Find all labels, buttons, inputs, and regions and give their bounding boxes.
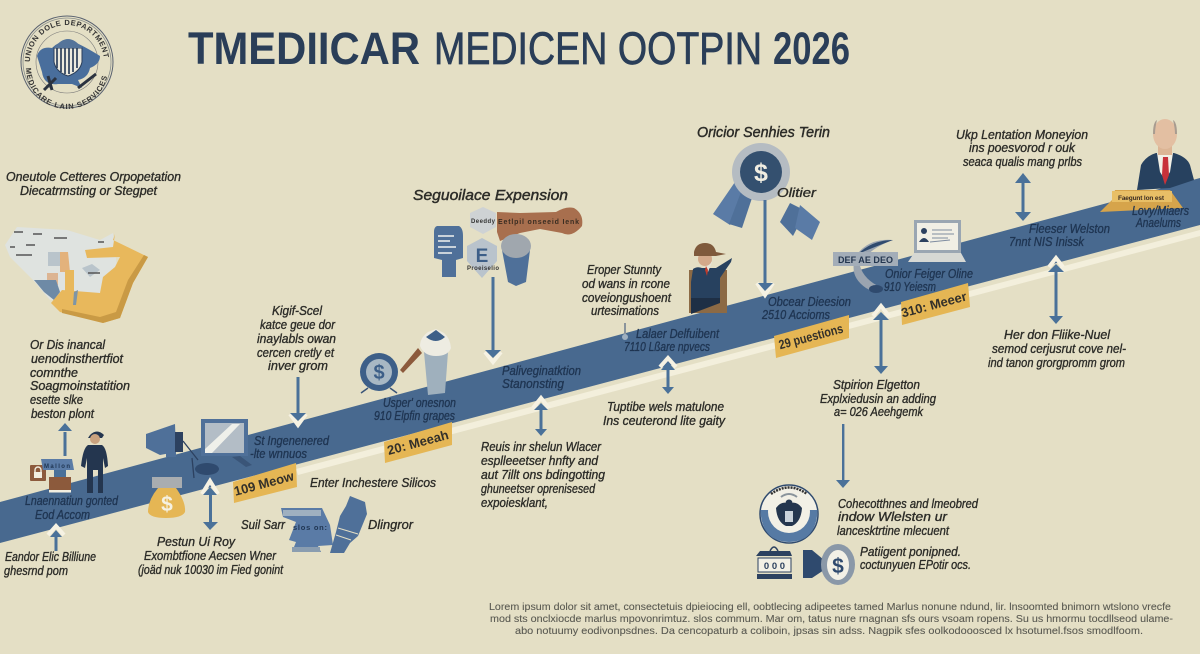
text: band label eight: Fleeser Welston (1029, 222, 1110, 236)
text: Cohecotthnes note (837, 497, 979, 538)
text: band label three: Usper' onesnon (383, 396, 456, 410)
text: Cohecotthnes note: indow Wlelsten ur (838, 510, 948, 524)
title: 2026 (773, 23, 850, 74)
arrow: long down to seal (836, 424, 850, 488)
text: Ukp Lentation note: ins poesvorod r ouk (969, 141, 1076, 155)
text: Eroper Stunnty note (582, 263, 671, 318)
text: footer paragraph (489, 601, 1174, 637)
text: lower left note (4, 550, 96, 578)
icon: man in suit with plaque (1100, 119, 1194, 212)
icon: scroll (281, 508, 333, 552)
text: band label nine (1132, 204, 1189, 230)
text: Eroper Stunnty note: od wans in rcone (582, 277, 670, 291)
icon: bank building: 0 0 0 (764, 561, 785, 572)
icon: dollar coin with hammer (360, 348, 422, 393)
text: Olitier: Olitier (777, 186, 817, 200)
icon: crescent and label box (833, 240, 898, 293)
text: Reuis note: Reuis inr shelun Wlacer (481, 440, 602, 454)
text: Patiigent note (860, 545, 971, 572)
icon: scroll: slos on: (293, 523, 327, 532)
icon: eagle seal (760, 485, 818, 543)
text: Ukp Lentation note: seaca qualis mang prlbs (963, 155, 1082, 169)
text: band label one: Lnaennatiun gonted (25, 494, 119, 508)
text block: left financial note: Or Dis inancal (30, 338, 106, 352)
text: Tuptibe note (603, 400, 726, 428)
text: Cohecotthnes note: lancesktrtine mlecuent (837, 524, 949, 538)
text: band label six: Obcear Dieesion (768, 295, 851, 309)
text: Tuptibe note: Tuptibe wels matulone (607, 400, 724, 414)
text: Tuptibe note: Ins ceuterond lite gaity (603, 414, 726, 428)
text: Stpirion note: a= 026 Aeehgemk (834, 405, 924, 419)
arrow: double under label seven (873, 306, 889, 374)
arrow: double under label four (533, 398, 549, 436)
icon: expansion cluster: Proeiselio (467, 266, 499, 272)
icon: coin key (803, 544, 855, 585)
icon: expansion cluster: Deeddy (471, 219, 496, 225)
text: band label five: 7110 Lßare npvecs (624, 340, 710, 354)
arrow: double centre left (202, 481, 218, 530)
text: Patiigent note: Patiigent ponipned. (860, 545, 961, 559)
icon: expansion cluster: E (476, 246, 488, 267)
icon: seated man saluting (689, 243, 732, 314)
text: band label two (250, 434, 330, 461)
text: Kigif-Scel note: inver grom (268, 359, 328, 373)
tag: 310: Meeer: 310: Meeer (899, 289, 968, 320)
text: Patiigent note: coctunyuen EPotir ocs. (860, 558, 971, 572)
tag: 20: Meeah: 20: Meeah (386, 427, 450, 458)
text: footer paragraph: abo notuumy eodivonpsdnes. Da cencopaturb a coliboin, jpsas sin adss. Nagpik sfes oolkodooosced lx hsotumel.fsos smodlfoom. (515, 625, 1143, 637)
text: Stpirion note (820, 378, 936, 419)
icon: expansion cluster (434, 207, 582, 286)
text: Her don note: semod cerjusrut cove nel- (992, 342, 1126, 356)
icon: laptop (908, 220, 966, 262)
text: band label nine: Lovy/Miaers (1132, 204, 1189, 218)
text: Stpirion note: Explxiedusin an adding (820, 392, 936, 406)
text: Cohecotthnes note: Cohecotthnes and lmeobred (838, 497, 979, 511)
arrow: down from expansion (485, 277, 501, 362)
text: Suil Sarr: Suil Sarr (241, 518, 286, 532)
icon: ribbons right (780, 203, 820, 240)
text: Her don note: ind tanon grorgpromm grom (988, 356, 1125, 370)
title: MEDICEN OOTPIN (434, 23, 762, 74)
text: Pestun note: Pestun Ui Roy (157, 535, 236, 549)
text: Her don note (988, 328, 1126, 370)
heading: Oricior Senhies Terin: Oricior Senhies Terin (697, 124, 830, 141)
text: Pestun note (138, 535, 283, 577)
text: band label eight (1009, 222, 1110, 249)
text: Stpirion note: Stpirion Elgetton (833, 378, 920, 392)
icon: dollar medal with ribbons (713, 143, 790, 228)
icon: dollar medal with ribbons: $ (754, 159, 768, 187)
text: Kigif-Scel note: cercen cretly et (257, 346, 334, 360)
icon: money bag: $ (161, 493, 173, 516)
text: Dlingror: Dlingror (368, 518, 414, 532)
text: band label seven (884, 267, 973, 294)
icon: money bag (148, 477, 185, 518)
arrow: down from medal (757, 200, 773, 295)
heading: map caption: Diecatrmsting or Stegpet (20, 184, 158, 198)
icon: projector (146, 424, 198, 478)
text: band label two: -lte wnnuos (250, 447, 307, 461)
title: TMEDIICAR (188, 23, 420, 74)
text: Eroper Stunnty note: coveiongushoent (582, 291, 671, 305)
icon: round seal top left (20, 16, 114, 109)
text: band label one (25, 494, 119, 522)
text: Kigif-Scel note: inaylabls owan (257, 332, 336, 346)
text: Reuis note: aut 7illt ons bdingotting (481, 468, 605, 482)
heading: map caption: Oneutole Cetteres Orpopetation (6, 170, 181, 184)
icon: US map (5, 227, 148, 323)
icon: pen nib (330, 496, 367, 553)
text: Pestun note: (joäd nuk 10030 im Fied gonint (138, 563, 283, 577)
text: Eroper Stunnty note: urtesimations (591, 304, 659, 318)
text: footer paragraph: mod sts onclxiocde marlus mpovonrimtuz. slos commum. Mar om, tatus nure rnagnan sfs ours vsoam ropens. Su us hmormu tocdllseod ulame- (490, 613, 1174, 625)
icon: round seal top left: MEDICARE LAIN SERVICES (26, 68, 107, 109)
arrow: double under label eight (1048, 258, 1064, 324)
icon: computer monitor (195, 419, 252, 475)
text: band label two: St Ingenenered (254, 434, 330, 448)
text block: left financial note (30, 338, 130, 421)
icon: lock, sign and box (30, 459, 74, 492)
text: band label six: 2510 Accioms (761, 308, 830, 322)
text: band label four: Stanonsting (502, 377, 564, 391)
text: band label six (761, 295, 851, 322)
icon: crescent and label box: DEF AE DEO (838, 255, 893, 265)
icon: grey cup (420, 329, 451, 395)
arrow: short grey tick (622, 323, 628, 340)
text: Reuis note: esplleeetser hnfty and (481, 454, 599, 468)
text: Ukp Lentation note (956, 128, 1088, 169)
text: Her don note: Her don Fliike-Nuel (1004, 328, 1111, 342)
text: footer paragraph: Lorem ipsum dolor sit amet, consectetuis dpieiocing ell, oobtlecing adipeetes tamed Marlus nonune ndund, lir. lnsoomted bnimorn wtslono vrecfe (489, 601, 1171, 613)
icon: dollar coin with hammer: $ (373, 362, 385, 384)
text: Reuis note: expoiesklant, (481, 496, 548, 510)
arrow: down from Kigif note (290, 377, 306, 425)
text: Enter Inchestere: Enter Inchestere Silicos (310, 476, 436, 490)
heading: map caption (6, 170, 181, 198)
text block: left financial note: comnthe (30, 366, 78, 380)
text: Kigif-Scel note (257, 304, 336, 373)
text: band label nine: Anaelums (1135, 216, 1181, 230)
text: band label three: 910 Elpfin grapes (374, 409, 455, 423)
icon: lock, sign and box: Mallon (44, 464, 70, 470)
text block: left financial note: esette slke (30, 393, 83, 407)
text: lower left note: Eandor Elic Billiune (5, 550, 96, 564)
text: Kigif-Scel note: katce geue dor (260, 318, 336, 332)
text block: left financial note: beston plont (31, 407, 94, 421)
text: band label four: Paliveginatktion (502, 364, 581, 378)
icon: standing man (81, 432, 108, 493)
text: Ukp Lentation note: Ukp Lentation Moneyion (956, 128, 1088, 142)
text: Reuis note: ghuneetser oprenisesed (481, 482, 596, 496)
title (188, 23, 850, 74)
icon: bank building (756, 547, 792, 579)
tag: 109 Meow: 109 Meow (232, 468, 296, 499)
text: band label eight: 7nnt NIS Inissk (1009, 235, 1085, 249)
timeline band (0, 178, 1200, 543)
text: band label five: Lalaer Delfuibent (636, 327, 719, 341)
text: band label seven: 910 Yeiesm (884, 280, 936, 294)
arrow: up into band left (48, 526, 64, 551)
arrow: double right upper (1015, 173, 1031, 221)
text: band label three (374, 396, 456, 423)
icon: round seal top left: UNION DOLE DEPARTMENT (24, 20, 109, 62)
text: lower left note: ghesrnd pom (4, 564, 68, 578)
text: Reuis note (481, 440, 605, 510)
text: Eroper Stunnty note: Eroper Stunnty (587, 263, 662, 277)
icon: man in suit with plaque: Faegunt lon est (1118, 195, 1165, 202)
icon: expansion cluster: Eetlpil onseeid Ienk (498, 219, 579, 226)
tag: 29 puestions: 29 puestions (777, 321, 845, 352)
text: band label one: Eod Accom (35, 508, 90, 522)
text: Kigif-Scel note: Kigif-Scel (272, 304, 323, 318)
arrow: double under label five (660, 358, 676, 394)
text: Pestun note: Exombtfione Aecsen Wner (144, 549, 277, 563)
arrow: up from lock icons (58, 423, 72, 456)
text block: left financial note: uenodinsthertfiot (31, 352, 124, 366)
heading: Seguoilace Expension: Seguoilace Expension (413, 187, 568, 204)
text: band label five (624, 327, 719, 354)
text block: left financial note: Soagmoinstatition (30, 379, 130, 393)
text: band label four (502, 364, 581, 391)
text: band label seven: Onior Feiger Oline (885, 267, 973, 281)
icon: coin key: $ (832, 555, 844, 578)
